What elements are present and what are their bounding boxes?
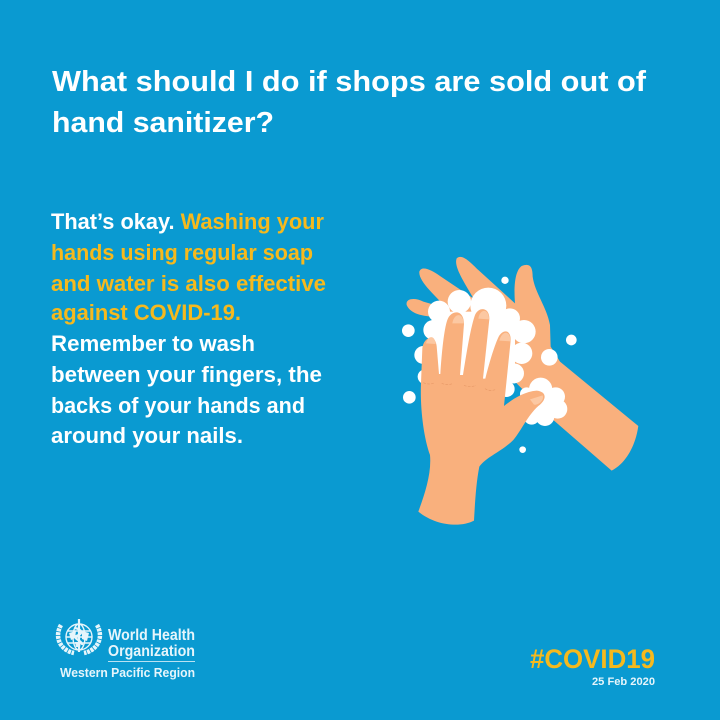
front hand [418,309,545,525]
title: What should I do if shops are sold out of [52,66,646,98]
knuckle creases [423,383,496,391]
staff and serpent [75,619,82,652]
text block: advice [51,209,326,448]
organization name: World Health [108,627,195,644]
organization name [60,627,195,680]
text block: advice: Remember to wash [51,331,255,356]
organization name: Western Pacific Region [60,665,195,680]
title [52,66,646,139]
soap bubbles [402,277,577,453]
text block: advice: against COVID-19. [51,300,241,325]
landmasses [69,631,89,647]
fingernails [426,311,543,405]
date: 25 Feb 2020 [592,676,655,688]
hashtag: #COVID19 [530,644,655,674]
thumb foam [520,378,567,426]
text block: advice: That’s okay. Washing your [51,209,324,234]
text block: advice: between your fingers, the [51,362,322,387]
laurel [58,625,100,653]
text block: advice: around your nails. [51,423,243,448]
icon: WHO emblem [58,619,100,653]
title: hand sanitizer? [52,107,274,139]
icon: hands washing with soap [402,257,638,525]
globe [66,624,92,650]
large foam cloud [414,288,536,397]
text block: advice: and water is also effective [51,271,326,296]
text block: advice: backs of your hands and [51,393,305,418]
logo: World Health Organization Western Pacific Region [58,619,195,680]
text block: advice: hands using regular soap [51,240,313,265]
organization name: Organization [108,643,195,660]
back hand and arm [407,257,638,471]
